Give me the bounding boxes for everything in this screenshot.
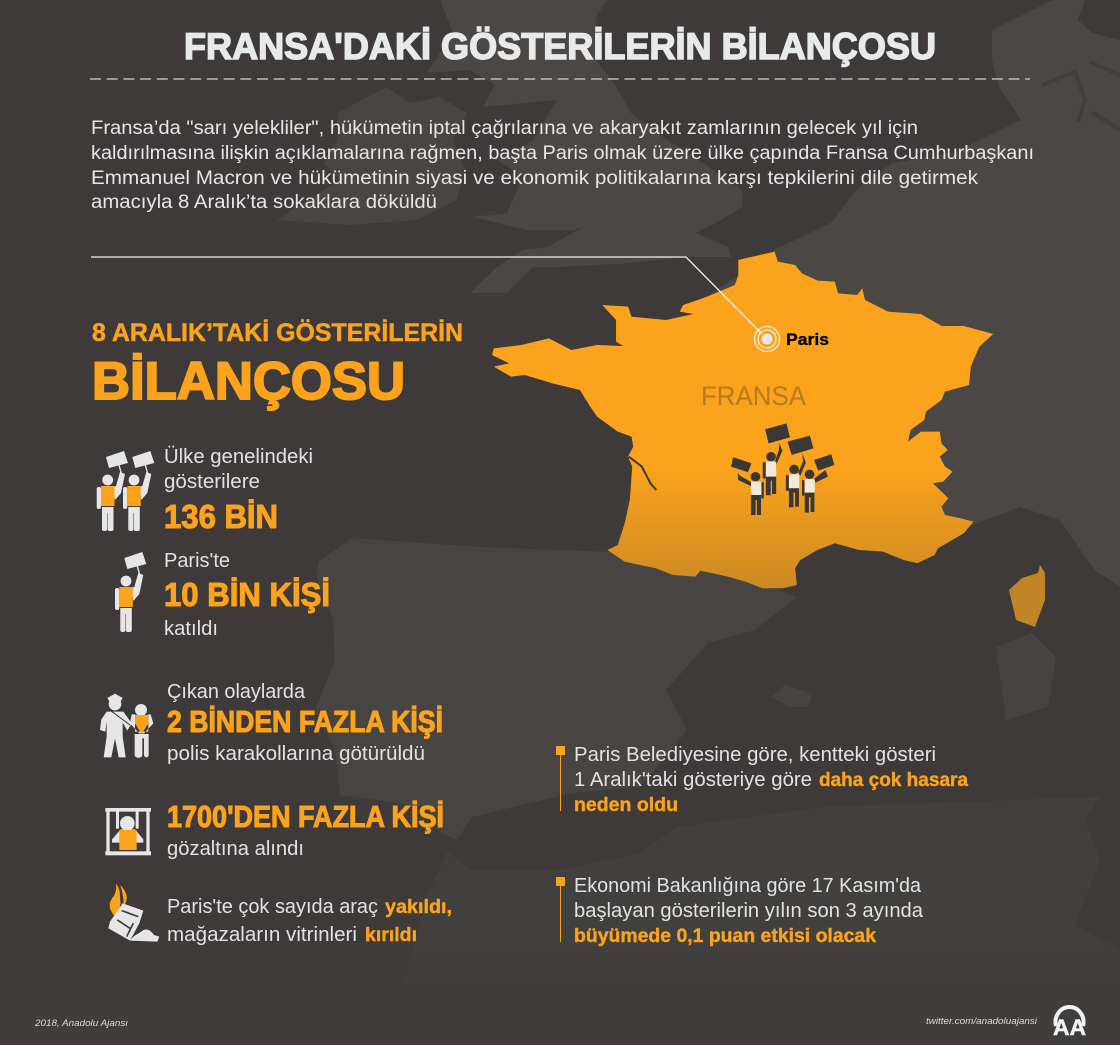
footer credit: 2018, Anadolu Ajansı <box>34 1018 128 1029</box>
land: North Africa <box>390 797 1120 1045</box>
land: European continent <box>700 0 1120 587</box>
text block: Paris'te çok sayıda araç <box>167 896 378 918</box>
text block: katıldı <box>164 618 218 640</box>
note text: Paris Belediyesine göre, kentteki gösteri <box>574 744 936 766</box>
text block <box>167 799 444 860</box>
country label: FRANSA <box>701 381 806 411</box>
text block: Ülke genelindeki <box>164 446 313 468</box>
bullet marker <box>556 877 565 942</box>
land: Iberian Peninsula <box>315 538 797 840</box>
stat: 10 thousand people in Paris <box>115 550 330 640</box>
note: Ministry of Economy <box>556 875 924 947</box>
section heading: BİLANÇOSU <box>92 352 405 411</box>
text block: yakıldı, <box>385 896 452 918</box>
text block <box>167 681 443 765</box>
land: Mallorca <box>771 685 812 707</box>
bullet marker <box>556 746 565 811</box>
note text: Ekonomi Bakanlığına göre 17 Kasım'da <box>574 875 922 897</box>
stat: more than 1700 detained <box>105 799 444 860</box>
note text: daha çok hasara <box>819 769 968 791</box>
note text <box>574 875 924 947</box>
map of France <box>91 252 1045 627</box>
intro paragraph: amacıyla 8 Aralık’ta sokaklara döküldü <box>91 192 437 213</box>
text block <box>164 446 313 535</box>
icon: burning car <box>108 883 159 942</box>
land: Ireland <box>277 87 467 225</box>
section heading <box>92 318 463 411</box>
text block: polis karakollarına götürüldü <box>167 743 425 765</box>
text block: 136 BİN <box>164 498 278 535</box>
icon: person behind bars <box>105 808 151 855</box>
Paris label: Paris <box>786 330 829 349</box>
note text: 1 Aralık'taki gösteriye göre <box>574 769 812 791</box>
note: Paris municipality <box>556 744 968 816</box>
intro paragraph: Fransa’da "sarı yelekliler", hükümetin iptal çağrılarına ve akaryakıt zamlarının gelecek yıl için <box>91 118 918 139</box>
text block: 1700'DEN FAZLA KİŞİ <box>167 799 444 834</box>
text block <box>164 550 330 640</box>
stat: more than 2000 taken to police stations <box>100 681 443 765</box>
intro paragraph: kaldırılmasına ilişkin açıklamalarına rağmen, başta Paris olmak üzere ülke çapında Fransa Cumhurbaşkanı <box>91 143 1034 164</box>
section heading: 8 ARALIK’TAKİ GÖSTERİLERİN <box>92 318 463 347</box>
text block: 10 BİN KİŞİ <box>164 576 330 613</box>
stat: cars burned, windows broken <box>108 883 452 946</box>
icon: two protesters <box>97 451 154 531</box>
text block: gözaltına alındı <box>167 838 304 860</box>
footer twitter handle: twitter.com/anadoluajansi <box>926 1016 1038 1027</box>
text block: Paris'te <box>164 550 230 572</box>
text block: gösterilere <box>164 471 260 493</box>
text block <box>167 896 452 946</box>
Corsica <box>1009 565 1045 627</box>
logo: Anadolu Agency: AA <box>1053 1015 1086 1040</box>
Paris marker <box>754 326 780 352</box>
note text: büyümede 0,1 puan etkisi olacak <box>574 925 876 947</box>
icon: protesters group <box>731 423 834 515</box>
leader line to Paris <box>91 257 762 334</box>
text block: mağazaların vitrinleri <box>167 924 357 946</box>
icon: protester <box>115 552 146 632</box>
intro paragraph: Emmanuel Macron ve hükümetinin siyasi ve ekonomik politikalarına karşı tepkilerini dile getirmek <box>91 168 979 189</box>
France mainland <box>492 252 993 588</box>
stat: 136 thousand protesters <box>97 446 313 535</box>
land: Great Britain <box>427 0 742 293</box>
note text: başlayan gösterilerin yılın son 3 ayında <box>574 900 924 922</box>
land: Sardinia <box>996 633 1056 720</box>
intro paragraph <box>91 118 1034 213</box>
text block: kırıldı <box>365 924 417 946</box>
Baltic straits <box>1042 62 1120 130</box>
text block: Çıkan olaylarda <box>167 681 306 703</box>
Gironde estuary <box>629 457 656 490</box>
title: FRANSA'DAKİ GÖSTERİLERİN BİLANÇOSU <box>184 26 936 67</box>
icon: police officer and detainee <box>100 694 153 758</box>
note text: neden oldu <box>574 794 678 816</box>
note text <box>574 744 968 816</box>
text block: 2 BİNDEN FAZLA KİŞİ <box>167 704 443 739</box>
